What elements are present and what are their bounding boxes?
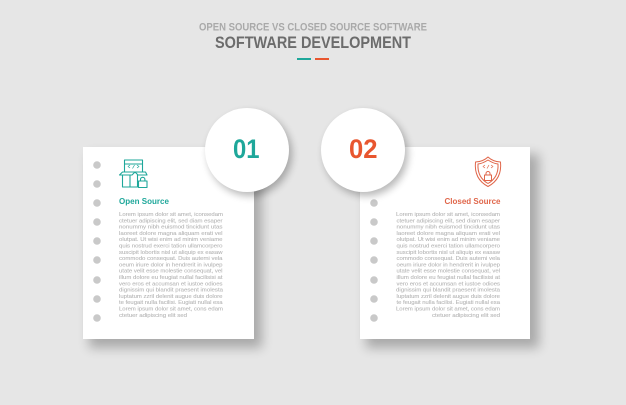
text block: open source: laoreet dolore magna aliquam erati vel	[119, 231, 222, 237]
text block: closed source: laoreet dolore magna aliquam erati vel	[396, 231, 500, 237]
number badge 01: 01	[233, 134, 260, 164]
text block: open source: olutpat. Ut wisi enim ad minim veniame	[119, 237, 222, 243]
text block: open source: illum dolore eu feugiat nullal facilisisi at	[119, 275, 223, 281]
binder holes	[93, 161, 101, 322]
text block: open source: dignissim qui blandit praesent imolesta	[119, 288, 224, 294]
number badge 02: 02	[349, 134, 378, 164]
text block: closed source: oeum iriure dolor in hendrerit in ivulpep	[396, 262, 500, 268]
text block: open source: suscipit lobortis nisl ut aliquip ex easaw	[119, 250, 223, 256]
text block: closed source: ctetuer adipiscing elit sed	[432, 313, 500, 319]
text block: closed source: luptatum zzril delenit augue duis dolore	[396, 294, 500, 300]
number badge 02	[321, 108, 408, 196]
panel: open source	[83, 147, 262, 348]
number badge 01	[205, 108, 292, 196]
title: SOFTWARE DEVELOPMENT	[215, 34, 411, 52]
text block: open source: te feugait nulla facilisi. Eugiati nullal esa	[119, 300, 223, 306]
text block: open source: luptatum zzril delenit augue duis dolore	[119, 294, 222, 300]
text block: closed source: olutpat. Ut wisi enim ad minim veniame	[396, 237, 500, 243]
binder holes	[370, 199, 378, 322]
text block: closed source: dignissim qui blandit praesent imolesta	[396, 288, 501, 294]
text block: open source: vero eros et accumsan et iustoe odioes	[119, 281, 223, 287]
text block: closed source: illum dolore eu feugiat nullal facilisisi at	[396, 275, 500, 281]
text block: closed source	[396, 212, 501, 319]
text block: open source: Lorem ipsum dolor sit amet, iconsedam	[119, 212, 223, 218]
text block: open source	[119, 212, 224, 319]
text block: closed source: vero eros et accumsan et iustoe odioes	[396, 281, 500, 287]
text block: closed source: commodo consequat. Duis autemi vela	[396, 256, 501, 262]
accent dashes	[297, 58, 329, 60]
text block: open source: ctetuer adipiscing elit, sed diam esaper	[119, 218, 223, 224]
text block: closed source: Lorem ipsum dolor sit amet, cons edam	[396, 306, 500, 312]
text block: open source: Lorem ipsum dolor sit amet, cons edam	[119, 306, 223, 312]
text block: open source: nonummy nibh euismod tincidunt utas	[119, 225, 223, 231]
text block: closed source: utate velit esse molestie consequat, vel	[396, 269, 500, 275]
heading: closed source: Closed Source	[444, 196, 501, 206]
text block: open source: utate velit esse molestie consequat, vel	[119, 269, 222, 275]
text block: closed source: ctetuer adipiscing elit, sed diam esaper	[396, 218, 500, 224]
heading	[199, 22, 427, 60]
heading: open source: Open Source	[119, 196, 169, 206]
text block: open source: quis nostrud exerci tation ullamcorpero	[119, 244, 222, 250]
text block: closed source: Lorem ipsum dolor sit amet, iconsedam	[396, 212, 500, 218]
text block: closed source: suscipit lobortis nisl ut aliquip ex easaw	[396, 250, 501, 256]
panel: closed source	[360, 147, 539, 348]
icon: code box with lock	[120, 160, 147, 188]
subtitle: OPEN SOURCE VS CLOSED SOURCE SOFTWARE	[199, 22, 427, 34]
text block: closed source: nonummy nibh euismod tincidunt utas	[396, 225, 500, 231]
text block: closed source: quis nostrud exerci tation ullamcorpero	[396, 244, 500, 250]
text block: open source: commodo consequat. Duis autemi vela	[119, 256, 223, 262]
icon: shield with lock	[475, 157, 501, 186]
text block: open source: oeum iriure dolor in hendrerit in ivulpep	[119, 262, 222, 268]
text block: closed source: te feugait nulla facilisi. Eugiati nullal esa	[396, 300, 501, 306]
text block: open source: ctetuer adipiscing elit sed	[119, 313, 187, 319]
